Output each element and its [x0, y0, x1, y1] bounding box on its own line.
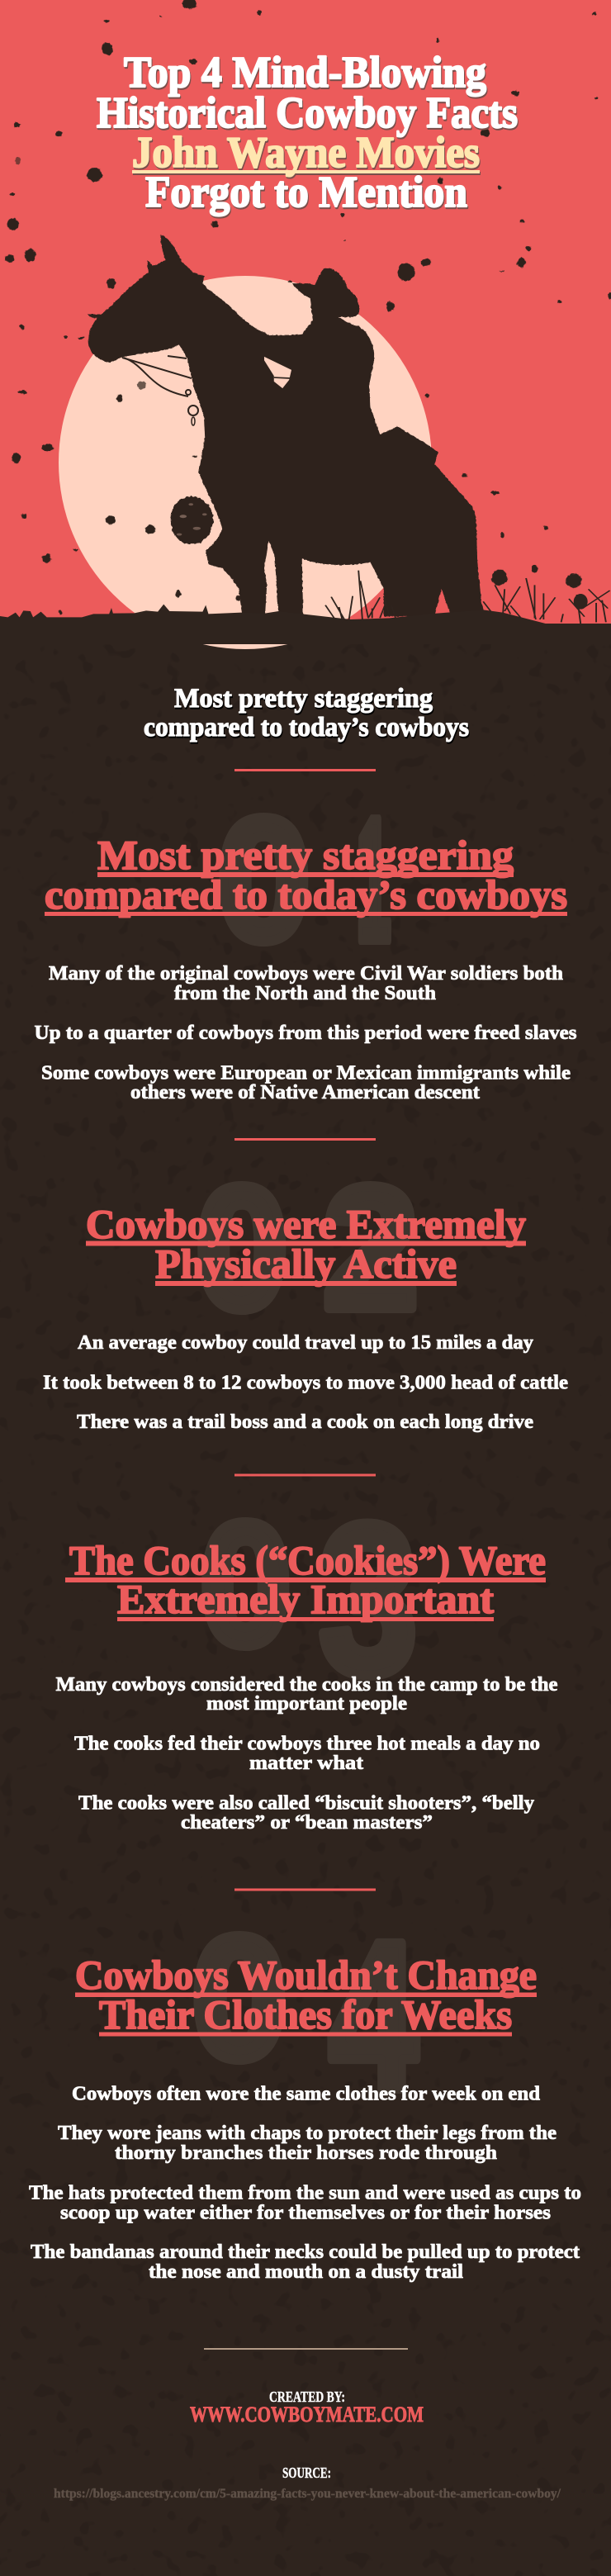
ghost number 02	[196, 1150, 419, 1345]
section 1 heading	[45, 832, 567, 918]
section 4 facts: The bandanas around their necks could be pulled up to protect	[31, 2242, 580, 2263]
footer divider	[204, 2348, 408, 2350]
ghost number 01: 0	[217, 781, 310, 977]
section 1 heading: compared to today’s cowboys	[45, 871, 567, 918]
section 1 facts: Some cowboys were European or Mexican immigrants while	[41, 1062, 571, 1084]
ghost number 02: 0	[196, 1150, 288, 1345]
section 2 heading: Physically Active	[155, 1241, 457, 1287]
title white lines	[97, 49, 518, 216]
section 4	[29, 1898, 581, 2283]
ghost number 04: 0	[192, 1900, 287, 2095]
section 4 heading	[75, 1952, 537, 2038]
ghost number 03: 0	[200, 1486, 291, 1682]
section 4 facts: scoop up water either for themselves or for their horses	[60, 2202, 551, 2223]
title	[97, 49, 518, 216]
website: WWW.COWBOYMATE.COM	[190, 2403, 424, 2427]
section 3 facts: Many cowboys considered the cooks in the camp to be the	[56, 1674, 558, 1696]
section 1: 1	[356, 781, 391, 977]
section 4 facts: thorny branches their horses rode through	[115, 2142, 497, 2164]
ghost number 01	[217, 781, 391, 977]
section 4 facts: Cowboys often wore the same clothes for week on end	[72, 2083, 541, 2104]
red sky	[0, 0, 611, 628]
section 4 facts: They wore jeans with chaps to protect their legs from the	[58, 2123, 557, 2144]
divider	[234, 1138, 376, 1141]
section 1 facts: Many of the original cowboys were Civil War soldiers both	[49, 963, 563, 984]
divider	[234, 1888, 376, 1891]
ghost number 03: 3	[319, 1480, 418, 1720]
paint splatter particles	[5, 0, 611, 614]
intro text: Most pretty staggering	[174, 684, 433, 714]
source url: https://blogs.ancestry.com/cm/5-amazing-facts-you-never-knew-about-the-american-cowboy/	[54, 2487, 561, 2501]
ghost number 04	[192, 1898, 418, 2134]
section 3 heading: The Cooks (“Cookies”) Were	[69, 1537, 546, 1583]
section 4 facts: the nose and mouth on a dusty trail	[149, 2261, 463, 2283]
ghost number 02: 2	[323, 1150, 419, 1345]
title white lines: Historical Cowboy Facts	[97, 89, 518, 137]
reins and bridle	[122, 356, 198, 425]
horse and rider silhouette	[88, 235, 485, 616]
ground and grass	[0, 571, 611, 644]
mottled hoof	[170, 496, 213, 544]
section 4 facts	[29, 2083, 581, 2283]
divider	[234, 1473, 376, 1477]
section 3 facts: The cooks fed their cowboys three hot meals a day no	[74, 1733, 540, 1754]
section 3 facts: most important people	[206, 1693, 407, 1715]
created by label: CREATED BY:	[269, 2389, 345, 2405]
section 3	[56, 1480, 558, 1834]
section 2 facts: It took between 8 to 12 cowboys to move 3,000 head of cattle	[43, 1373, 568, 1394]
section 3 facts: The cooks were also called “biscuit shooters”, “belly	[78, 1792, 534, 1814]
section 2 facts: There was a trail boss and a cook on each long drive	[77, 1411, 533, 1433]
section 1 facts	[35, 963, 577, 1103]
ghost number 03	[200, 1480, 418, 1720]
section 4 heading: Cowboys Wouldn’t Change	[75, 1952, 537, 1998]
section 4 facts: The hats protected them from the sun and were used as cups to	[29, 2182, 581, 2204]
title white lines: Top 4 Mind-Blowing	[124, 49, 486, 97]
footer credits	[54, 2389, 561, 2501]
source label: SOURCE:	[282, 2465, 331, 2481]
section 3 heading: Extremely Important	[117, 1576, 494, 1622]
section 3 facts: cheaters” or “bean masters”	[181, 1812, 433, 1834]
intro text: compared to today’s cowboys	[144, 713, 469, 742]
section 2 heading	[86, 1201, 526, 1287]
section 1 facts: others were of Native American descent	[130, 1082, 480, 1103]
section 1	[35, 781, 577, 1103]
divider	[234, 769, 376, 771]
section 3 facts: matter what	[249, 1753, 363, 1774]
intro text	[144, 684, 469, 742]
sun	[59, 276, 432, 649]
title white lines: Forgot to Mention	[145, 168, 467, 216]
title highlighted line: John Wayne Movies	[132, 129, 480, 177]
section 1 facts: from the North and the South	[174, 983, 436, 1004]
ghost number 04: 4	[329, 1898, 418, 2134]
section 1 facts: Up to a quarter of cowboys from this period were freed slaves	[35, 1022, 577, 1044]
section 3 facts	[56, 1674, 558, 1834]
section 2 heading: Cowboys were Extremely	[86, 1201, 526, 1247]
section 2 facts	[43, 1332, 568, 1433]
section 2	[43, 1150, 568, 1433]
subtle background texture	[0, 636, 611, 2576]
section 2 facts: An average cowboy could travel up to 15 miles a day	[78, 1332, 533, 1354]
section 1 heading: Most pretty staggering	[97, 832, 514, 878]
section 3 heading	[65, 1537, 546, 1622]
section 4 heading: Their Clothes for Weeks	[99, 1991, 512, 2038]
